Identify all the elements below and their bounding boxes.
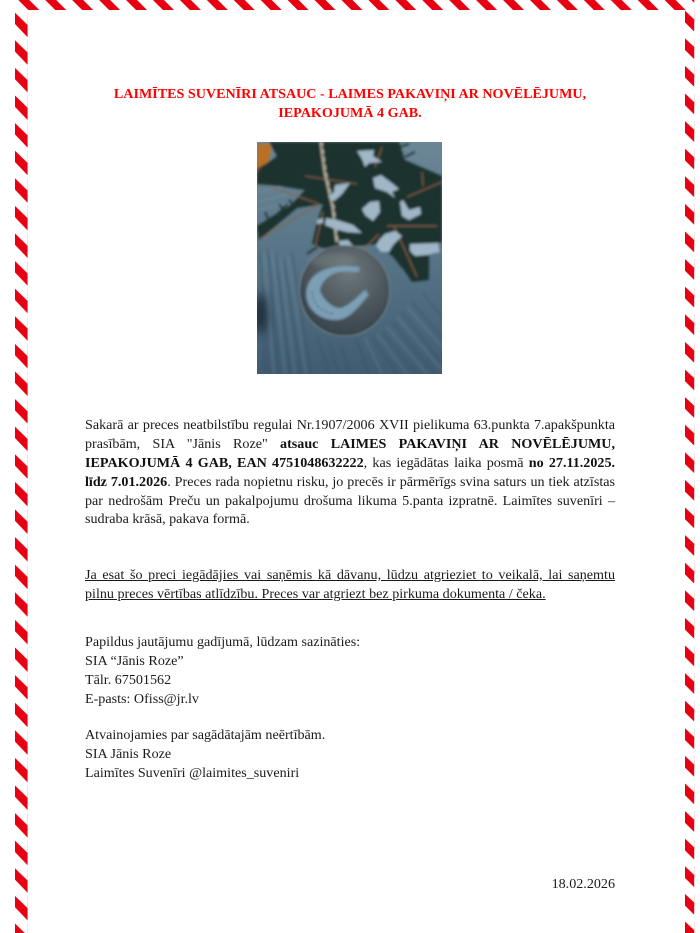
plate — [300, 245, 390, 336]
figurines — [317, 150, 440, 256]
recall description paragraph — [85, 417, 616, 527]
recall description paragraph: sudraba krāsā, pakava formā. — [85, 511, 250, 527]
apology and signature: SIA Jānis Roze — [85, 746, 171, 762]
apology and signature: Laimītes Suvenīri @laimites_suveniri — [85, 765, 299, 781]
contact details: Tālr. 67501562 — [85, 672, 171, 688]
contact details: SIA “Jānis Roze” — [85, 653, 184, 669]
twigs — [261, 147, 442, 277]
apology and signature — [85, 727, 325, 781]
contact details — [85, 634, 360, 707]
title: IEPAKOJUMĀ 4 GAB. — [278, 105, 422, 121]
wood grain — [260, 252, 296, 322]
date: 18.02.2026 — [552, 876, 615, 892]
recall description paragraph: par nedrošām Preču un pakalpojumu drošuma likuma 5.panta izpratnē. Laimītes suvenīri – — [85, 493, 615, 509]
orange fruit — [257, 144, 271, 174]
product photo: horseshoe on plate with silver figurines — [257, 142, 442, 374]
apology and signature: Atvainojamies par sagādātajām neērtībām. — [85, 727, 325, 743]
title — [114, 86, 586, 121]
dark wood shadow — [253, 294, 267, 334]
return instructions (underlined): Ja esat šo preci iegādājies vai saņēmis kā dāvanu, lūdzu atgrieziet to veikalā, lai saņemtu — [85, 567, 615, 583]
recall description paragraph: IEPAKOJUMĀ 4 GAB, EAN 4751048632222, kas iegādātas laika posmā no 27.11.2025. — [85, 455, 615, 471]
horseshoe — [306, 266, 369, 320]
recall description paragraph: līdz 7.01.2026. Preces rada nopietnu risku, jo precēs ir pārmērīgs svina saturs un tiek atzīstas — [85, 474, 615, 490]
title: LAIMĪTES SUVENĪRI ATSAUC - LAIMES PAKAVIŅI AR NOVĒLĒJUMU, — [114, 86, 586, 102]
contact details: E-pasts: Ofiss@jr.lv — [85, 691, 199, 707]
return instructions (underlined) — [85, 567, 615, 602]
recall description paragraph: prasībām, SIA "Jānis Roze" atsauc LAIMES PAKAVIŅI AR NOVĒLĒJUMU, — [85, 436, 615, 452]
fir branches — [257, 142, 442, 282]
recall description paragraph: Sakarā ar preces neatbilstību regulai Nr.1907/2006 XVII pielikuma 63.punkta 7.apakšpunkta — [85, 417, 615, 433]
return instructions (underlined): pilnu preces vērtības atlīdzību. Preces var atgriezt bez pirkuma dokumenta / čeka. — [85, 586, 546, 602]
rope — [321, 142, 337, 242]
contact details: Papildus jautājumu gadījumā, lūdzam sazināties: — [85, 634, 360, 650]
